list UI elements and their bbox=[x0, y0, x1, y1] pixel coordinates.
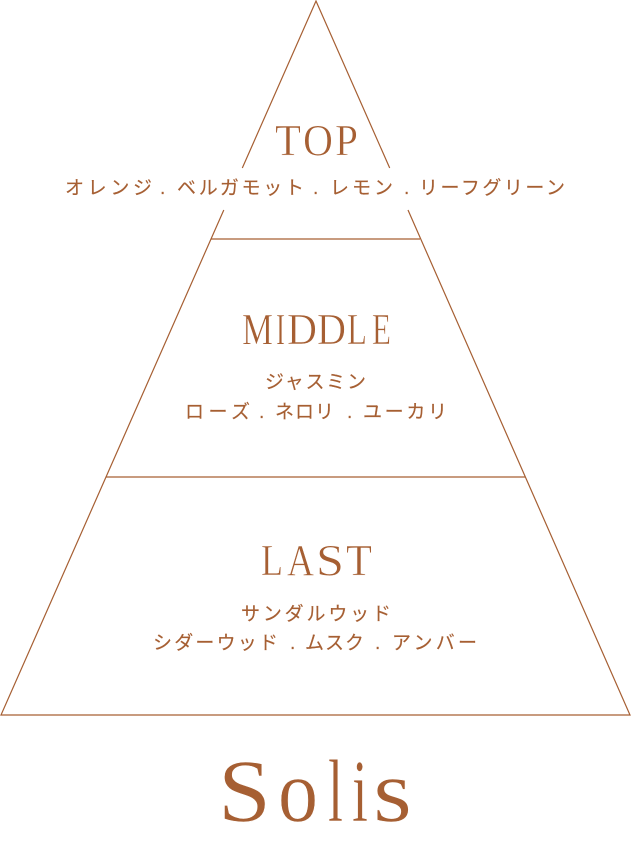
heading: TOP bbox=[275, 116, 358, 165]
top notes: レモン bbox=[330, 178, 393, 199]
brand name: Solis: s bbox=[373, 743, 412, 841]
top notes: . bbox=[160, 178, 165, 199]
heading: MIDDLE: D bbox=[317, 305, 346, 354]
heading: TOP: P bbox=[335, 116, 358, 165]
last notes: シダーウッド bbox=[153, 632, 278, 654]
last notes: . bbox=[375, 633, 380, 654]
brand name: Solis: i bbox=[352, 743, 368, 841]
last notes: . bbox=[290, 633, 295, 654]
heading: MIDDLE: E bbox=[372, 305, 391, 354]
top notes: ベルガモット bbox=[177, 177, 304, 199]
brand name: Solis: o bbox=[278, 743, 318, 841]
heading: LAST: L bbox=[261, 536, 283, 585]
last notes: サンダルウッド bbox=[241, 603, 391, 625]
heading: MIDDLE: D bbox=[287, 305, 317, 354]
heading: TOP: O bbox=[303, 116, 333, 165]
brand name: Solis: S bbox=[218, 743, 271, 841]
top notes: オレンジ bbox=[65, 178, 152, 199]
middle notes: ネロリ bbox=[275, 402, 334, 423]
heading: MIDDLE: I bbox=[276, 305, 285, 354]
top notes bbox=[65, 177, 565, 199]
middle notes: ローズ bbox=[185, 401, 250, 423]
brand name: Solis bbox=[218, 743, 412, 841]
middle notes: ユーカリ bbox=[363, 402, 447, 423]
heading: LAST bbox=[261, 536, 372, 585]
middle notes bbox=[185, 372, 447, 423]
brand name: Solis: l bbox=[328, 743, 343, 841]
heading: MIDDLE: L bbox=[347, 305, 367, 354]
middle notes: . bbox=[347, 402, 352, 423]
heading: LAST: T bbox=[346, 536, 372, 585]
heading: LAST: A bbox=[287, 536, 314, 585]
middle notes: ジャスミン bbox=[265, 372, 366, 393]
heading: MIDDLE: M bbox=[242, 305, 273, 354]
last notes: アンバー bbox=[392, 633, 477, 654]
heading: MIDDLE bbox=[242, 305, 391, 354]
top notes: . bbox=[313, 178, 318, 199]
middle notes: . bbox=[259, 402, 264, 423]
heading: TOP: T bbox=[275, 116, 301, 165]
last notes bbox=[153, 603, 477, 654]
top notes: リーフグリーン bbox=[419, 177, 565, 199]
last notes: ムスク bbox=[305, 632, 364, 654]
top notes: . bbox=[404, 178, 409, 199]
heading: LAST: S bbox=[316, 536, 344, 585]
